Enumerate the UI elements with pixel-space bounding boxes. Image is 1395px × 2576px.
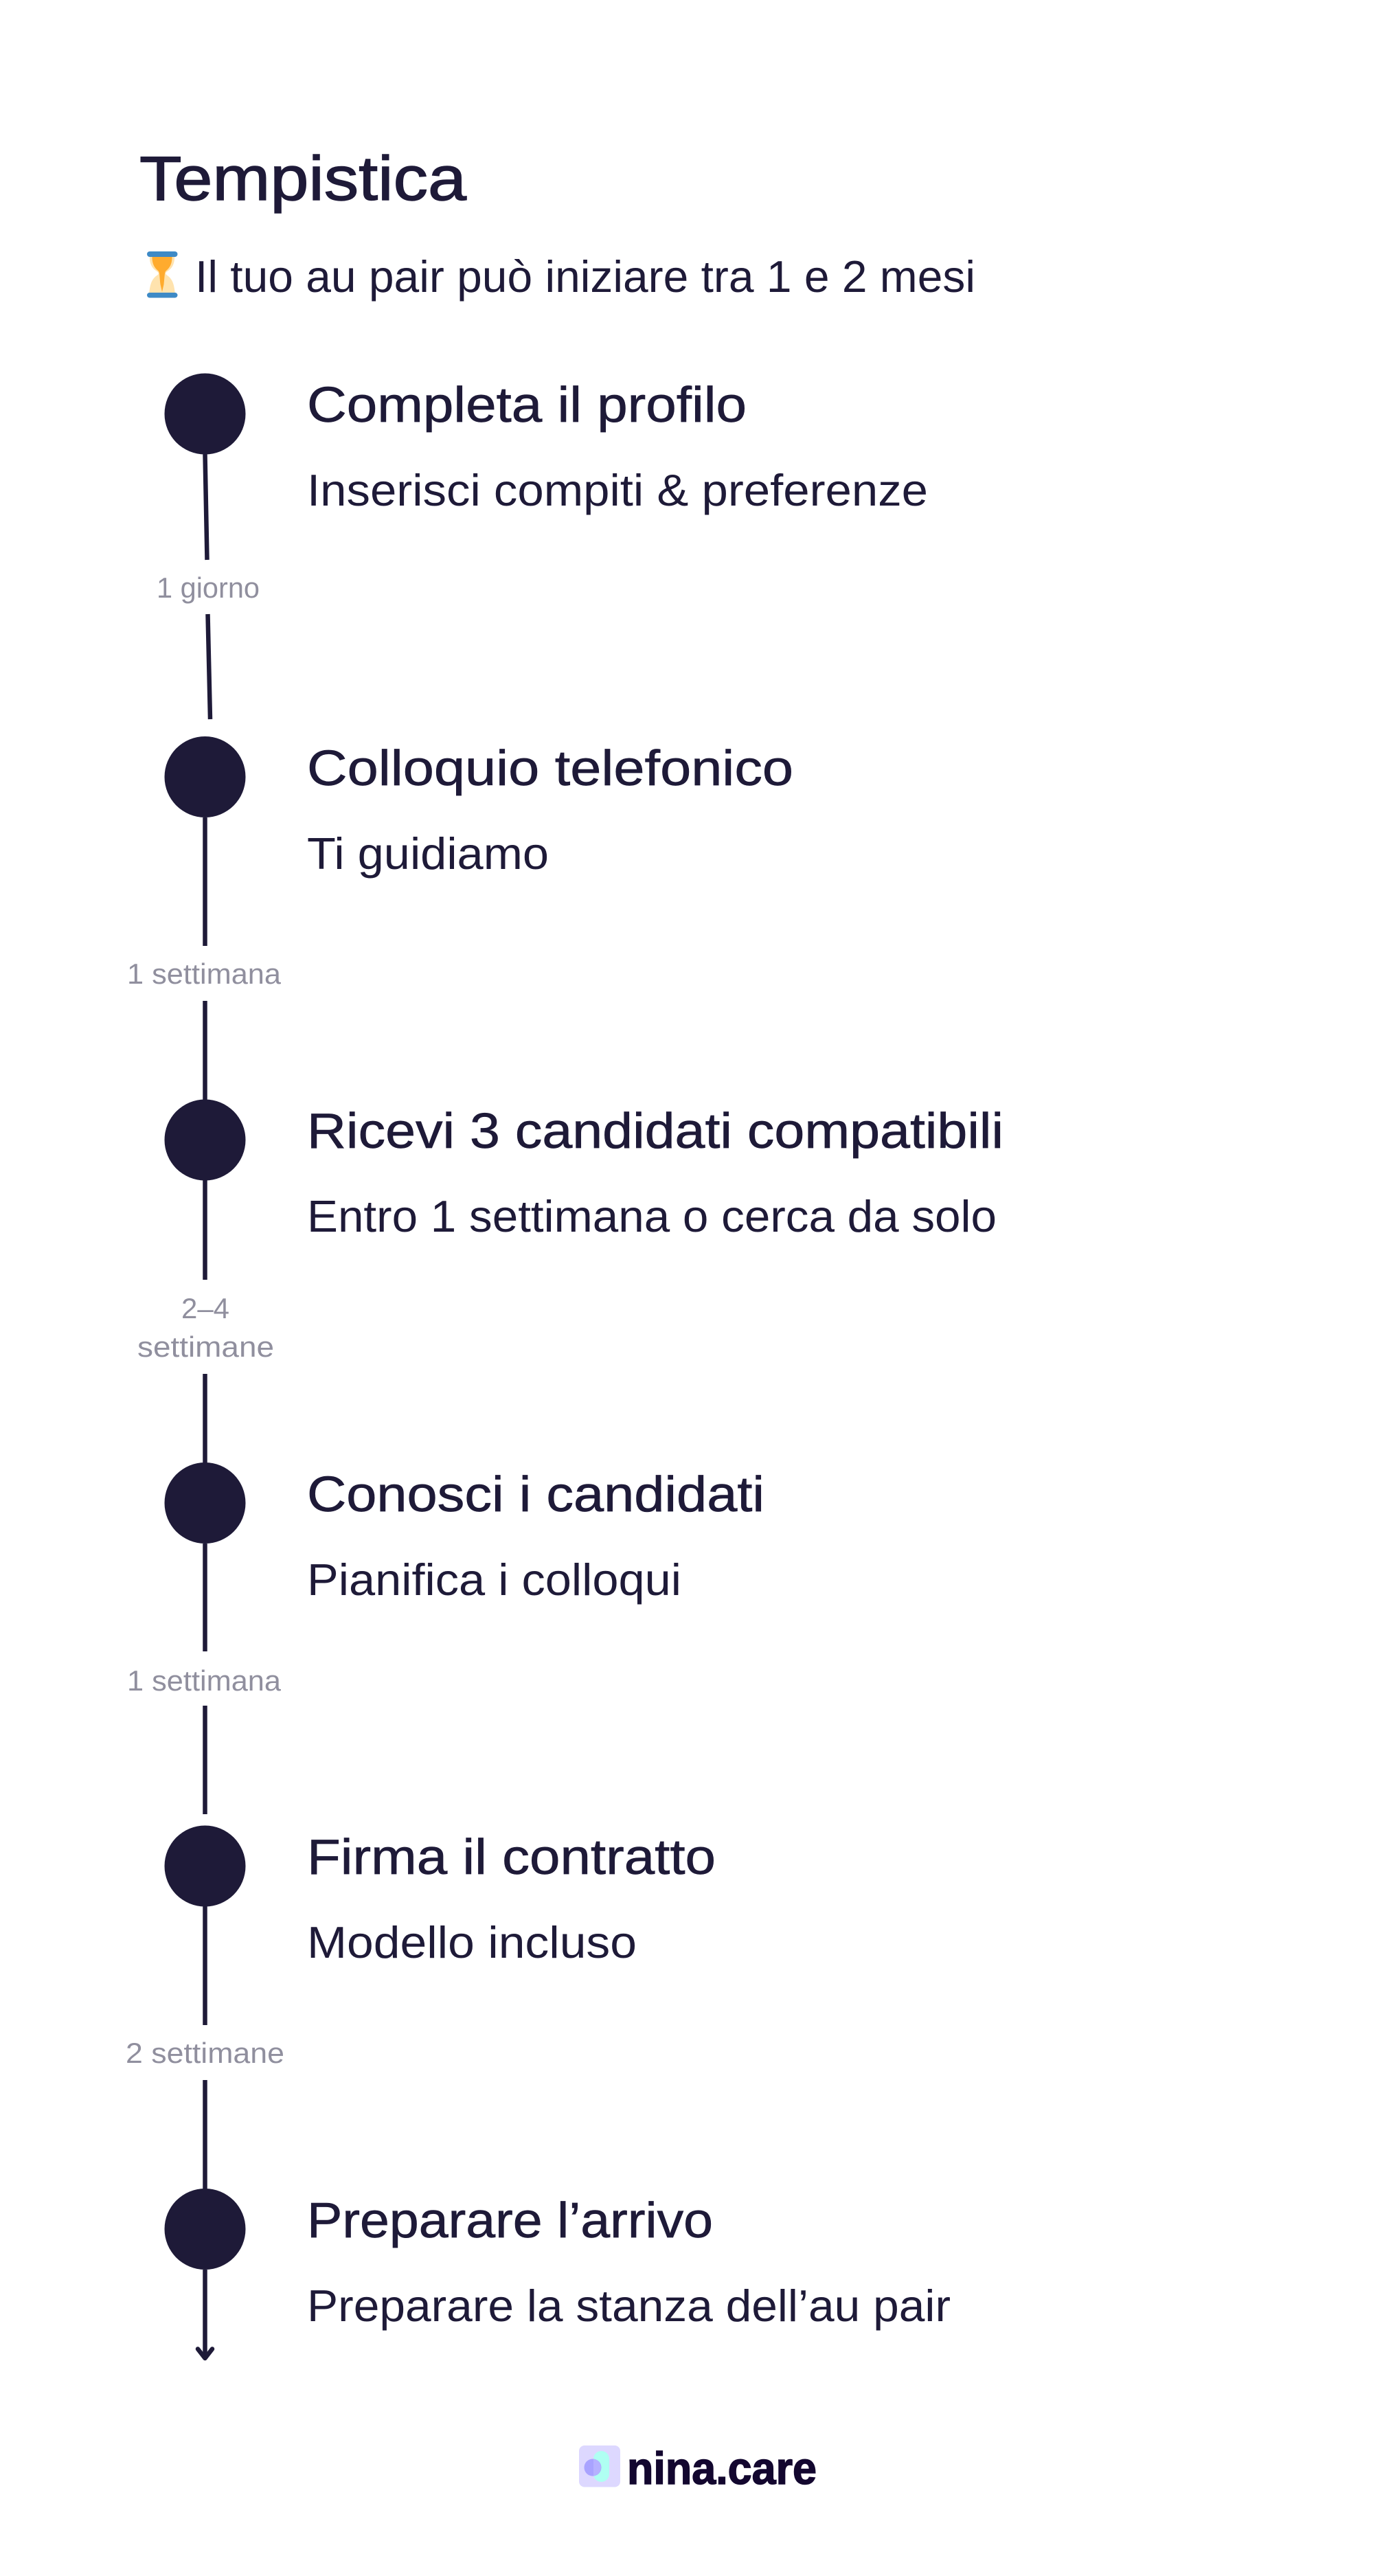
heading: Conosci i candidati — [307, 1467, 764, 1522]
step 2 — [165, 736, 793, 879]
logo wordmark: nina.care — [627, 2443, 817, 2494]
duration label: 2 settimane: 2 settimane — [126, 2037, 284, 2069]
subtitle with hourglass — [147, 251, 975, 302]
duration label: 2-4 settimane — [137, 1292, 274, 1363]
marker — [165, 2189, 246, 2270]
heading: Preparare l’arrivo — [307, 2193, 713, 2248]
step 1 — [165, 374, 928, 515]
connector: step 3 to 4 — [137, 1180, 274, 1463]
description: Inserisci compiti & preferenze — [307, 465, 928, 515]
description: Pianifica i colloqui — [307, 1555, 681, 1605]
connector: step 1 to 2 — [157, 454, 260, 719]
step 5 — [165, 1826, 716, 1967]
step 6 — [165, 2189, 951, 2331]
title: Tempistica — [139, 144, 466, 214]
marker — [165, 1462, 246, 1544]
heading: Firma il contratto — [307, 1830, 716, 1885]
heading: Completa il profilo — [307, 378, 747, 433]
description: Modello incluso — [307, 1917, 637, 1967]
heading: Colloquio telefonico — [307, 741, 793, 796]
description: Entro 1 settimana o cerca da solo — [307, 1191, 997, 1241]
marker — [165, 374, 246, 455]
subtitle text: Il tuo au pair può iniziare tra 1 e 2 mesi — [195, 251, 975, 302]
marker — [165, 1826, 246, 1907]
step 3 — [165, 1099, 1003, 1241]
description: Preparare la stanza dell’au pair — [307, 2281, 951, 2331]
duration label: 2-4 settimane: 2–4 — [181, 1292, 229, 1324]
marker — [165, 1099, 246, 1180]
arrow: end of timeline — [198, 2270, 212, 2358]
icon: hourglass — [147, 251, 177, 298]
step 4 — [165, 1462, 764, 1605]
duration label: 1 giorno: 1 giorno — [157, 572, 260, 604]
duration label: 2-4 settimane: settimane — [137, 1331, 274, 1363]
logo mark — [579, 2445, 620, 2487]
description: Ti guidiamo — [307, 828, 549, 879]
duration label: 1 settimana: 1 settimana — [127, 1664, 282, 1697]
logo: nina.care — [579, 2443, 817, 2494]
heading: Ricevi 3 candidati compatibili — [307, 1104, 1003, 1159]
duration label: 1 settimana: 1 settimana — [127, 958, 282, 990]
marker — [165, 736, 246, 817]
